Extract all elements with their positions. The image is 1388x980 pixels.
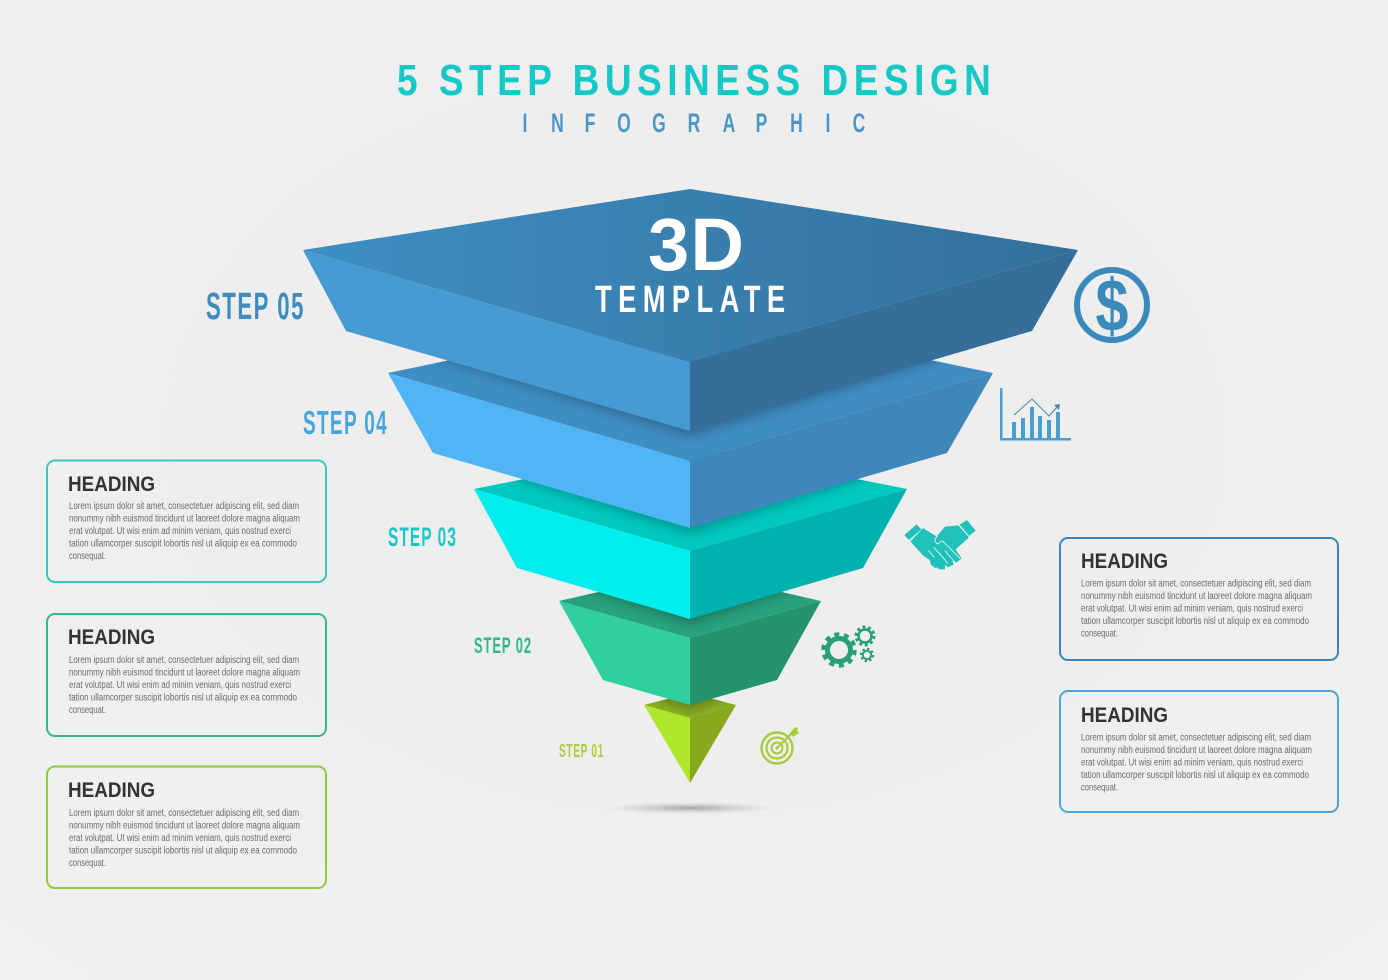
body text: tation ullamcorper suscipit lobortis nisl ut aliquip ex ea commodo <box>69 538 297 550</box>
icon: dollar coin <box>1077 265 1147 348</box>
panel: right card 1 <box>1060 538 1338 660</box>
body text: Lorem ipsum dolor sit amet, consectetuer adipiscing elit, sed diam <box>1081 578 1311 590</box>
icon: gears <box>824 627 874 666</box>
layer: step 04 <box>388 310 993 528</box>
layer: step 03 <box>474 446 907 619</box>
panel: left card 3 <box>47 766 326 888</box>
layer: step 01 <box>644 693 736 783</box>
funnel label: template: TEMPLATE <box>595 279 785 321</box>
body text: tation ullamcorper suscipit lobortis nisl ut aliquip ex ea commodo <box>1081 770 1309 781</box>
body text: erat volutpat. Ut wisi enim ad minim veniam, quis nostrud exerci <box>1081 604 1303 614</box>
body text <box>69 808 300 869</box>
body text: consequat. <box>1081 628 1118 640</box>
layer: step 02 <box>559 571 821 705</box>
icon: dollar coin: $ <box>1096 265 1128 348</box>
body text: consequat. <box>1081 782 1118 794</box>
body text: consequat. <box>69 551 106 562</box>
body text: Lorem ipsum dolor sit amet, consectetuer adipiscing elit, sed diam <box>1081 732 1311 744</box>
heading: HEADING <box>68 779 155 802</box>
panel: left card 1 <box>47 460 326 582</box>
label: step 02: STEP 02 <box>474 633 532 658</box>
body text: Lorem ipsum dolor sit amet, consectetuer adipiscing elit, sed diam <box>69 655 299 666</box>
body text: Lorem ipsum dolor sit amet, consectetuer adipiscing elit, sed diam <box>69 501 299 512</box>
body text: tation ullamcorper suscipit lobortis nisl ut aliquip ex ea commodo <box>1081 616 1309 627</box>
label: step 03: STEP 03 <box>388 522 457 552</box>
body text: Lorem ipsum dolor sit amet, consectetuer adipiscing elit, sed diam <box>69 808 299 819</box>
body text: nonummy nibh euismod tincidunt ut laoreet dolore magna aliquam <box>1081 591 1312 602</box>
funnel: 3D inverted pyramid <box>303 189 1078 783</box>
label: step 01: STEP 01 <box>559 741 604 761</box>
body text <box>69 501 300 562</box>
body text <box>69 655 300 716</box>
panel: left card 2 <box>47 614 326 736</box>
body text: erat volutpat. Ut wisi enim ad minim veniam, quis nostrud exerci <box>1081 758 1303 768</box>
icon: handshake <box>904 520 976 569</box>
body text: nonummy nibh euismod tincidunt ut laoreet dolore magna aliquam <box>69 668 300 678</box>
body text <box>1081 732 1312 794</box>
ground shadow <box>605 802 775 814</box>
heading: HEADING <box>1081 704 1168 727</box>
body text: nonummy nibh euismod tincidunt ut laoreet dolore magna aliquam <box>69 820 300 832</box>
body text: erat volutpat. Ut wisi enim ad minim veniam, quis nostrud exerci <box>69 833 291 844</box>
body text: tation ullamcorper suscipit lobortis nisl ut aliquip ex ea commodo <box>69 692 297 704</box>
icon: target <box>762 727 799 764</box>
body text: nonummy nibh euismod tincidunt ut laoreet dolore magna aliquam <box>69 514 300 524</box>
body text <box>1081 578 1312 640</box>
body text: nonummy nibh euismod tincidunt ut laoreet dolore magna aliquam <box>1081 745 1312 756</box>
body text: consequat. <box>69 858 106 869</box>
label: step 05: STEP 05 <box>206 286 305 328</box>
heading: HEADING <box>68 473 155 496</box>
layer: step 05 <box>303 189 1078 431</box>
heading: HEADING <box>68 626 155 649</box>
panel: right card 2 <box>1060 691 1338 812</box>
subtitle: INFOGRAPHIC <box>523 107 865 138</box>
heading: HEADING <box>1081 550 1168 573</box>
funnel label: 3D: 3D <box>648 203 744 286</box>
icon: bar chart <box>1000 388 1071 440</box>
body text: erat volutpat. Ut wisi enim ad minim veniam, quis nostrud exerci <box>69 526 291 537</box>
body text: tation ullamcorper suscipit lobortis nisl ut aliquip ex ea commodo <box>69 846 297 856</box>
title: 5 STEP BUSINESS DESIGN <box>397 55 991 105</box>
label: step 04: STEP 04 <box>303 404 388 441</box>
body text: erat volutpat. Ut wisi enim ad minim veniam, quis nostrud exerci <box>69 680 291 691</box>
body text: consequat. <box>69 705 106 716</box>
